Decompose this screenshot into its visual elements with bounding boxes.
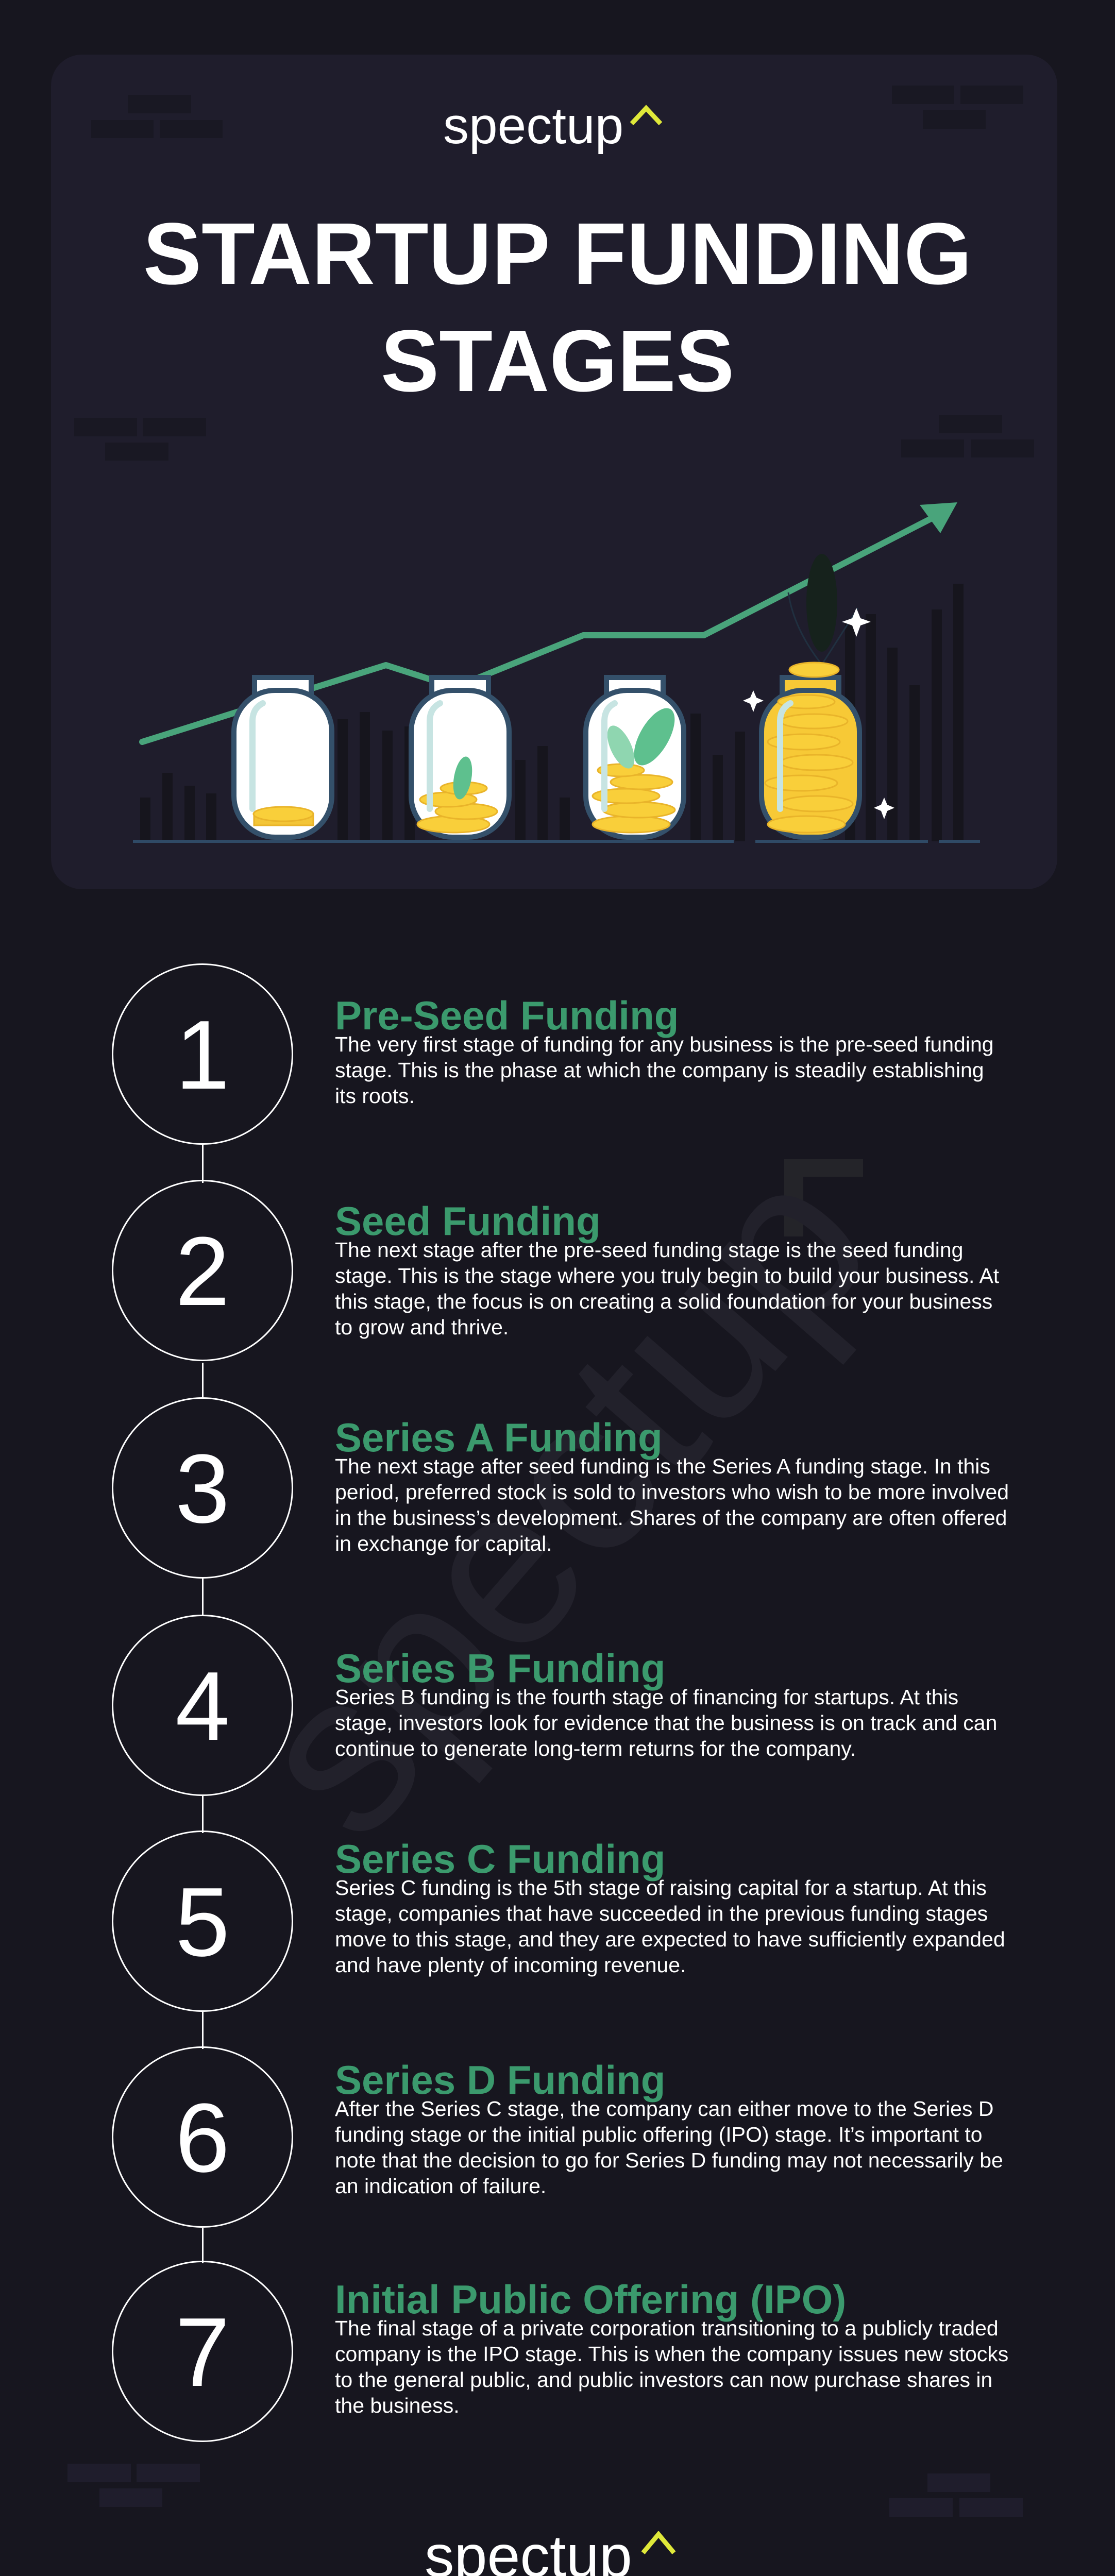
- stage 2: [112, 1180, 999, 1361]
- stage 3: Series A Funding: [335, 1415, 663, 1460]
- stage 5: 5: [175, 1868, 230, 1977]
- stage 3: [112, 1397, 1009, 1579]
- stage 6: Series D Funding: [335, 2057, 665, 2103]
- stage 3: in exchange for capital.: [335, 1532, 552, 1555]
- stage 3: period, preferred stock is sold to investors who wish to be more involved: [335, 1480, 1009, 1504]
- stage 4: [112, 1615, 997, 1796]
- leaves: [450, 702, 683, 801]
- stage 5: Series C funding is the 5th stage of raising capital for a startup. At this: [335, 1876, 987, 1900]
- stage 2: Seed Funding: [335, 1198, 601, 1244]
- stage 6: note that the decision to go for Series D funding may not necessarily be: [335, 2148, 1003, 2172]
- header card: [51, 55, 1057, 889]
- stage 2: stage. This is the stage where you truly begin to build your business. At: [335, 1264, 999, 1287]
- stage 1: its roots.: [335, 1084, 415, 1108]
- title: [143, 205, 972, 410]
- stage 6: After the Series C stage, the company can either move to the Series D: [335, 2097, 993, 2121]
- stage 3: 3: [175, 1434, 230, 1544]
- background watermark: spectup: [205, 1133, 918, 1882]
- growth arrow: [142, 502, 957, 742]
- stage 3: in the business’s development. Shares of the company are often offered: [335, 1506, 1007, 1530]
- coins: [254, 663, 853, 833]
- jars: [234, 677, 859, 837]
- stage 7: 7: [175, 2298, 230, 2407]
- stage 4: stage, investors look for evidence that the business is on track and can: [335, 1711, 997, 1735]
- stage 6: 6: [175, 2083, 230, 2193]
- stage 2: to grow and thrive.: [335, 1315, 509, 1339]
- stage 5: Series C Funding: [335, 1836, 665, 1882]
- stage 5: [112, 1831, 1005, 2012]
- stage 5: and have plenty of incoming revenue.: [335, 1953, 686, 1977]
- stage 1: 1: [175, 1001, 230, 1110]
- sparkles: [743, 608, 894, 819]
- connectors: [202, 1145, 204, 2263]
- stage 7: The final stage of a private corporation transitioning to a publicly traded: [335, 2316, 999, 2340]
- stage 4: 4: [175, 1652, 230, 1761]
- stage 1: The very first stage of funding for any business is the pre-seed funding: [335, 1032, 994, 1056]
- stage 6: [112, 2046, 1003, 2228]
- stage 4: Series B Funding: [335, 1646, 665, 1691]
- stage 7: [112, 2261, 1008, 2442]
- stage 1: stage. This is the phase at which the company is steadily establishing: [335, 1058, 984, 1082]
- title: STARTUP FUNDING: [143, 205, 972, 303]
- stage 7: the business.: [335, 2394, 460, 2417]
- baseline: [133, 840, 980, 843]
- stage 4: continue to generate long-term returns for the company.: [335, 1737, 856, 1760]
- chart illustration: [133, 502, 980, 843]
- stage 7: to the general public, and public investors can now purchase shares in: [335, 2368, 992, 2392]
- stage 7: Initial Public Offering (IPO): [335, 2277, 846, 2322]
- stage 2: The next stage after the pre-seed funding stage is the seed funding: [335, 1238, 963, 1262]
- stage 5: stage, companies that have succeeded in the previous funding stages: [335, 1902, 988, 1925]
- stage 6: funding stage or the initial public offering (IPO) stage. It’s important to: [335, 2123, 983, 2146]
- stage 5: move to this stage, and they are expected to have sufficiently expanded: [335, 1927, 1005, 1951]
- stage 7: company is the IPO stage. This is when the company issues new stocks: [335, 2342, 1008, 2366]
- header logo: spectup: [443, 97, 623, 155]
- footer decorative blocks: [67, 2464, 1023, 2517]
- stage 6: an indication of failure.: [335, 2174, 546, 2198]
- stage 2: this stage, the focus is on creating a solid foundation for your business: [335, 1290, 992, 1313]
- plant jar 4: [788, 554, 858, 665]
- stage 2: 2: [175, 1217, 230, 1326]
- stage 1: Pre-Seed Funding: [335, 993, 679, 1038]
- header decorative blocks: [74, 86, 1034, 461]
- stage 4: Series B funding is the fourth stage of financing for startups. At this: [335, 1685, 958, 1709]
- title: STAGES: [381, 312, 734, 410]
- stage 1: [112, 963, 994, 1145]
- jar highlights: [252, 703, 790, 809]
- stage 3: The next stage after seed funding is the Series A funding stage. In this: [335, 1454, 990, 1478]
- bars: [140, 584, 964, 841]
